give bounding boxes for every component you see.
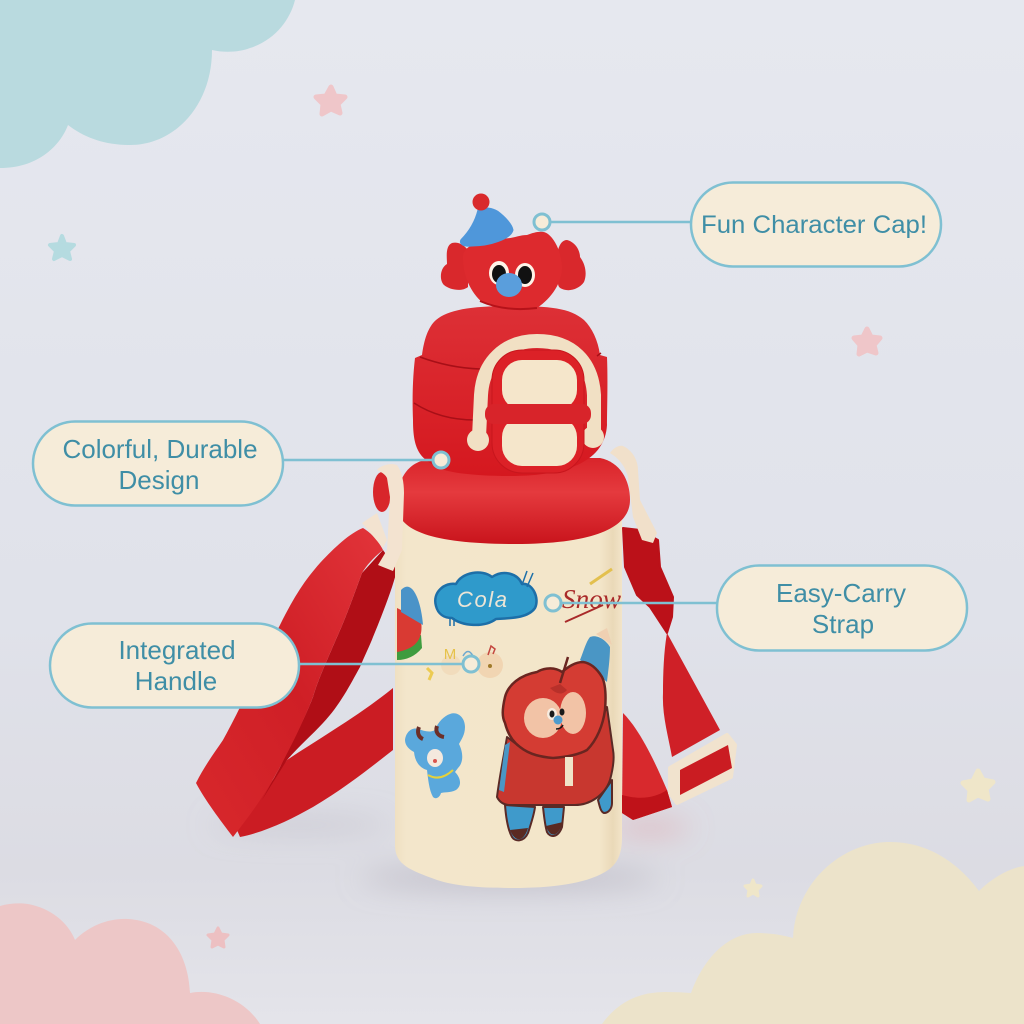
cap: latch upper panel <box>502 360 577 410</box>
cap: latch crossbar <box>485 404 591 424</box>
callout: colorful durable design <box>33 422 283 506</box>
star: pink right <box>854 329 880 354</box>
marker: design <box>433 452 449 468</box>
illustration: snow lettering: Snow <box>562 584 621 614</box>
marker: handle <box>463 656 479 672</box>
illustration: snow lettering <box>562 569 621 622</box>
cloud: pink bottom left <box>0 903 260 1024</box>
cap: cream carry handle <box>479 341 594 437</box>
illustration: cola cloud <box>435 571 537 626</box>
illustration: small doodles <box>427 646 503 680</box>
illustration: left edge character <box>397 587 423 660</box>
head collar line <box>480 301 537 309</box>
illustration: apple character <box>497 628 614 840</box>
callout: easy-carry strap <box>717 566 967 650</box>
eyes <box>489 261 535 287</box>
star: cream right <box>963 771 993 800</box>
leader line: strap <box>561 602 717 604</box>
lid: wide red collar <box>397 458 630 544</box>
cap: latch lower panel <box>502 417 577 466</box>
leader line: design <box>283 459 433 461</box>
lid: left strap pin <box>373 472 391 512</box>
callout: easy-carry strap: Easy-Carry <box>776 578 906 608</box>
character: cap topper <box>441 194 586 310</box>
cloud: cream bottom right <box>602 842 1024 1024</box>
star: pink small <box>208 928 228 947</box>
illustration: cola cloud: Cola <box>457 587 507 612</box>
leader line: handle <box>299 663 463 665</box>
callout: integrated handle: Handle <box>135 666 217 696</box>
star: cream small <box>745 880 761 896</box>
strap buckle <box>670 735 735 803</box>
callout: colorful durable design: Design <box>119 465 199 495</box>
callout: easy-carry strap: Strap <box>812 609 874 639</box>
strap: right band <box>622 528 720 820</box>
illustration: small doodles: M <box>444 646 456 663</box>
marker: cap <box>534 214 550 230</box>
hat pom <box>472 194 490 210</box>
marker: strap <box>545 595 561 611</box>
party hat <box>461 209 512 245</box>
bottle body <box>395 520 622 888</box>
callout: fun character cap <box>691 182 941 266</box>
callout: fun character cap: Fun Character Cap! <box>701 211 927 239</box>
head <box>463 232 562 310</box>
ears <box>441 240 586 290</box>
product: water bottle <box>196 194 735 888</box>
callout: colorful durable design: Colorful, Durable <box>62 434 258 464</box>
leader line: cap <box>550 221 691 223</box>
lid: left strap lug <box>362 464 404 571</box>
cap: red latch frame <box>492 350 584 473</box>
floor shadow <box>210 817 690 890</box>
strap: left loop <box>196 528 397 837</box>
cap: handle end knobs <box>467 426 604 451</box>
callout: integrated handle: Integrated <box>118 635 236 665</box>
lid: right strap lug <box>610 446 657 543</box>
callout: integrated handle <box>50 624 299 708</box>
cloud: teal top left <box>0 0 295 168</box>
star: teal <box>50 236 74 259</box>
star: pink top <box>316 87 345 114</box>
illustration: blue bear <box>405 713 465 798</box>
cap: stacked red dome <box>413 306 607 476</box>
nose <box>496 273 522 297</box>
